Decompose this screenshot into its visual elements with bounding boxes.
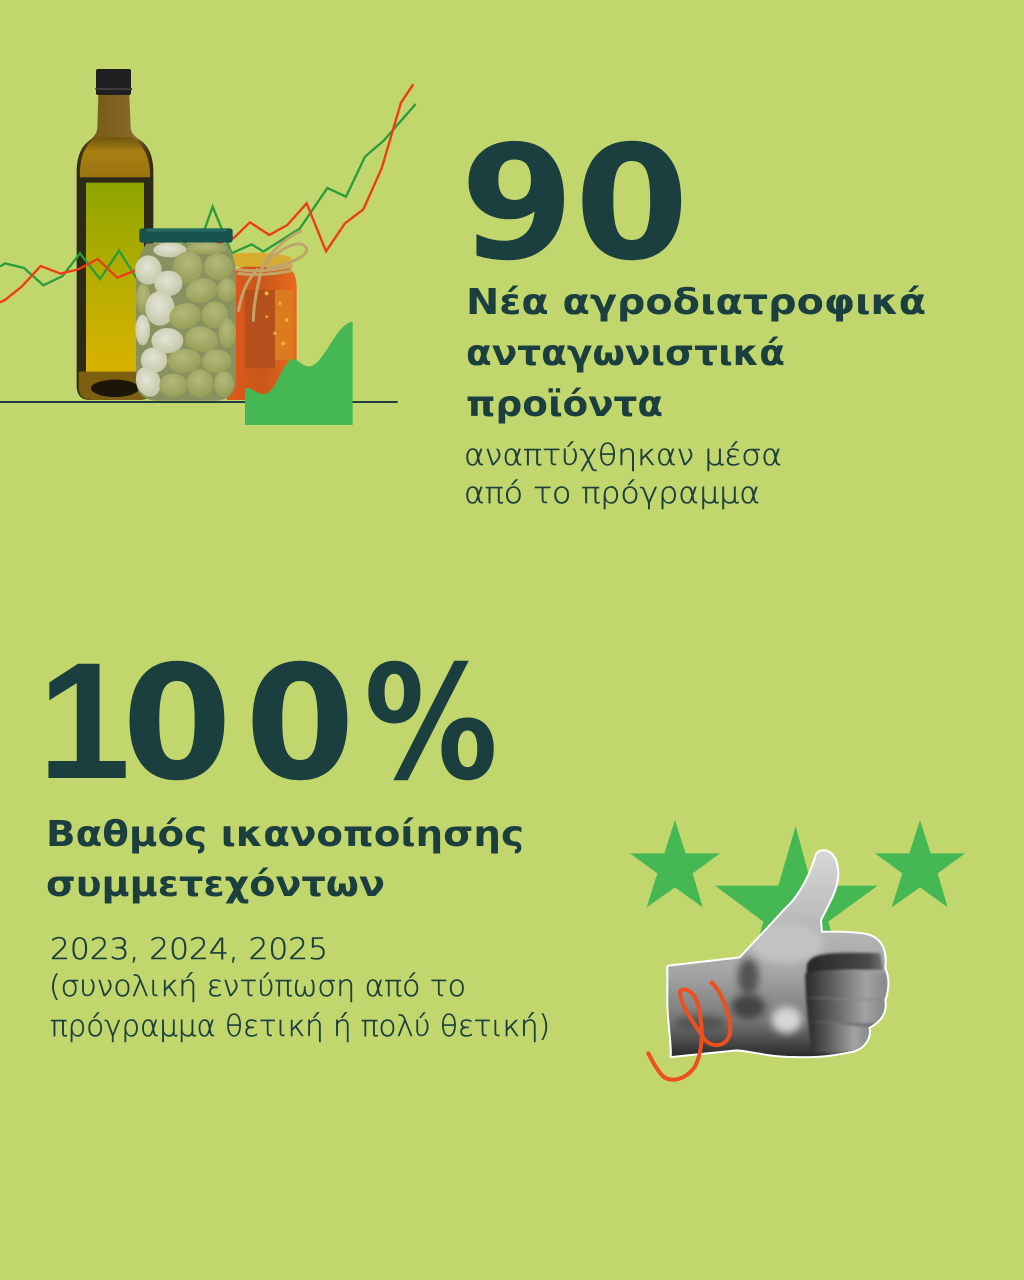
icon: thumbs-up hand [667,850,890,1058]
illustration: thumbs up with stars [630,820,965,1080]
text: years and note [49,932,550,1043]
text: developed through the programme: αναπτύχθηκαν μέσα [464,438,782,472]
ground line [0,401,398,403]
icon: honey jar [227,231,307,400]
illustration: food products with rising chart [0,69,416,425]
olives [132,242,236,400]
heading: participant satisfaction [46,814,524,905]
chart lines: green and red trends [0,84,416,302]
icon: red scribble [648,983,730,1080]
text: years and note: (συνολική εντύπωση από το [49,969,466,1003]
statistic: 100%: % [364,632,498,816]
fingers [805,953,887,1053]
icon: jar of olives [132,228,236,401]
text: years and note: 2023, 2024, 2025 [50,932,328,966]
heading: new agri-food products: Νέα αγροδιατροφικά [466,282,926,323]
statistic: 90: 90 [460,112,689,296]
heading: participant satisfaction: συμμετεχόντων [46,864,385,905]
heading: new agri-food products: προϊόντα [466,384,663,425]
heading: participant satisfaction: Βαθμός ικανοποίησης [46,814,524,855]
heading: new agri-food products [466,282,926,425]
twine bow [237,231,307,322]
icon: three stars [630,820,965,987]
chart: green area [245,322,353,425]
statistic: 100%: 00 [122,632,355,816]
text: developed through the programme [464,438,782,510]
heading: new agri-food products: ανταγωνιστικά [466,333,785,374]
text: developed through the programme: από το πρόγραμμα [464,476,760,510]
statistic: 100%: 1 [38,629,130,814]
icon: olive oil bottle [77,69,153,400]
statistic: 100% [38,629,498,816]
text: years and note: πρόγραμμα θετική ή πολύ θετική) [50,1009,550,1043]
